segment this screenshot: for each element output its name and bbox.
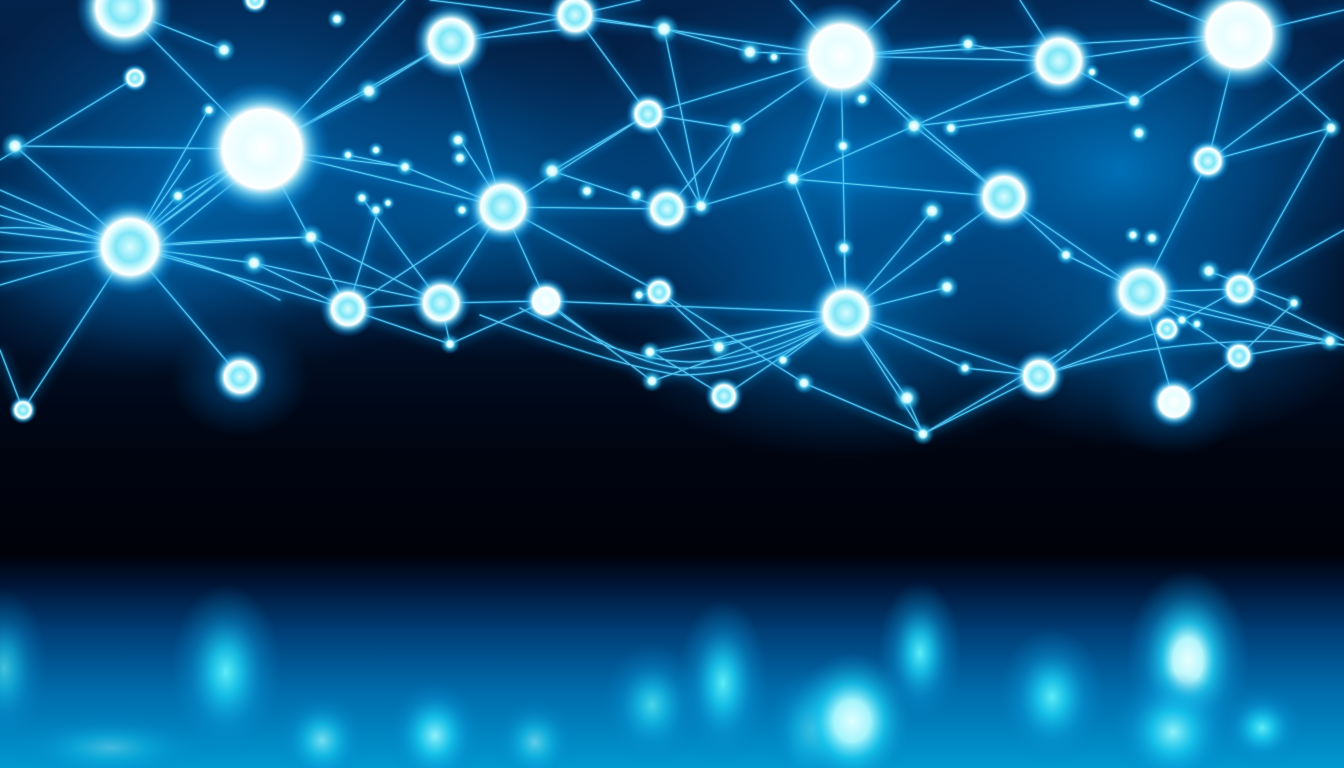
network nodes: large glowing hubs xyxy=(76,0,1295,351)
network nodes: medium glowing nodes xyxy=(9,0,1262,428)
floor reflections: blurred light pools xyxy=(0,570,1304,768)
background: blue haze around the network xyxy=(0,0,1344,460)
background: dark navy gradient xyxy=(0,0,1344,556)
network nodes: small bright dots xyxy=(1,9,1342,445)
floor: reflective blue surface xyxy=(0,556,1344,768)
network connection lines xyxy=(0,0,1344,434)
